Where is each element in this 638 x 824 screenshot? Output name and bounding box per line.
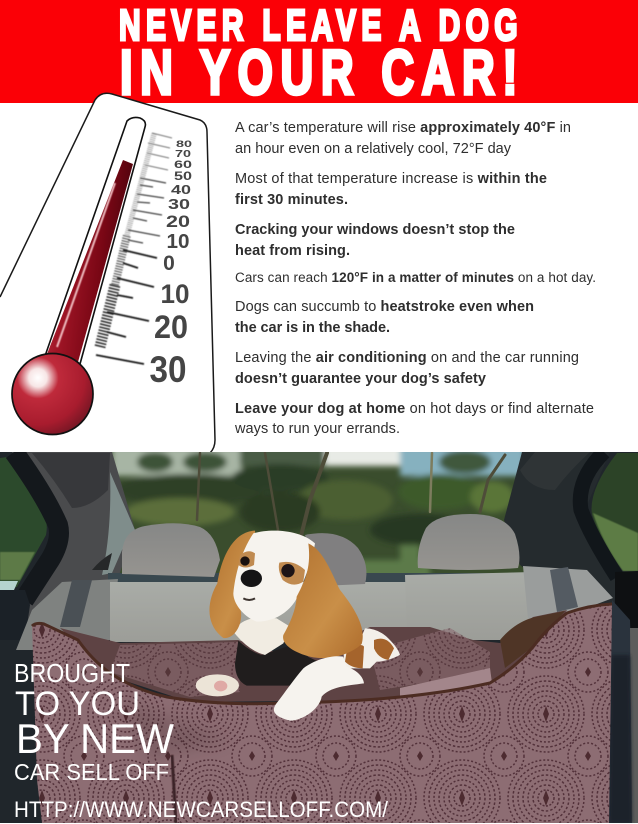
seat cover: back cushion [60,610,567,702]
scale numbers: 70 [175,149,192,160]
fact: heatstroke: the car is in the shade. [235,320,390,336]
thermometer body [0,93,215,453]
liquid highlight [57,183,115,347]
left side window [0,457,47,590]
by new: BY NEW [16,715,174,762]
scale numbers: 30 [150,349,186,390]
brought: BROUGHT [14,658,130,688]
fact: cracking windows: heat from rising. [235,243,350,259]
scale numbers: 60 [174,159,192,171]
dog head [233,531,315,622]
headrests [122,514,519,586]
text block: facts [234,120,596,437]
glass tube [45,117,145,364]
scale numbers: 10 [160,279,190,309]
dog right ear [283,543,363,658]
fact: cracking windows [235,222,515,259]
dog left ear [209,531,255,638]
fact: temperature rise: A car’s temperature will rise approximately 40°F in [235,120,571,136]
fact: 120 degrees: Cars can reach 120°F in a matter of minutes on a hot day. [235,270,596,285]
dog chest [233,617,290,655]
rear seat backs [16,566,613,650]
red liquid column [47,160,133,362]
dog harness vest [235,641,318,686]
dog [196,531,400,721]
right pillar [504,452,638,823]
title line one: NEVER LEAVE A DOG [119,0,517,49]
scale numbers: 10 [166,231,190,253]
dog left paw [196,674,239,696]
scale ticks [96,133,172,364]
fact: cracking windows: Cracking your windows doesn’t stop the [235,222,515,238]
website url: HTTP://WWW.NEWCARSELLOFF.COM/ [14,797,389,822]
scale numbers: 20 [154,309,188,345]
fact: temperature rise: an hour even on a relatively cool, 72°F day [235,141,512,157]
fact: first 30 minutes: first 30 minutes. [235,192,348,208]
dog eyes and nose [240,556,295,600]
fact: heatstroke: Dogs can succumb to heatstroke even when [235,299,534,315]
scale numbers: 0 [163,252,175,275]
scale numbers [150,139,192,390]
thermometer illustration [0,93,215,453]
dog eye patches [238,551,305,585]
scale numbers: 80 [176,139,192,150]
fact: air conditioning [235,350,579,387]
scale numbers: 50 [174,169,192,183]
fact: heatstroke [235,299,534,336]
fact: leave your dog at home [234,401,594,437]
fact: temperature rise [235,120,571,157]
title line two: IN YOUR CAR! [120,37,517,108]
to you: TO YOU [15,685,140,723]
fact: leave your dog at home: Leave your dog at home on hot days or find alternate [235,401,594,417]
photo: dog in car on seat cover [0,446,638,823]
thermometer bulb [12,354,93,434]
seat cover: front panel [32,604,612,823]
fact: leave your dog at home: ways to run your errands. [234,421,400,437]
fact: first 30 minutes: Most of that temperature increase is within the [235,171,547,187]
sponsor text [14,658,389,822]
dog front leg [274,656,364,721]
left pillar [6,452,135,620]
rear window scenery [112,452,524,573]
fact: first 30 minutes [235,171,547,208]
title banner [0,0,638,108]
dog rear and back [343,628,400,668]
photo base [0,452,638,823]
fact: air conditioning: doesn’t guarantee your dog’s safety [235,371,486,387]
scale numbers: 40 [171,182,191,197]
scale numbers: 20 [166,212,190,231]
fact: air conditioning: Leaving the air conditioning on and the car running [235,350,579,366]
car sell off: CAR SELL OFF [14,759,169,785]
scale numbers: 30 [168,196,190,213]
right side window [592,453,638,571]
